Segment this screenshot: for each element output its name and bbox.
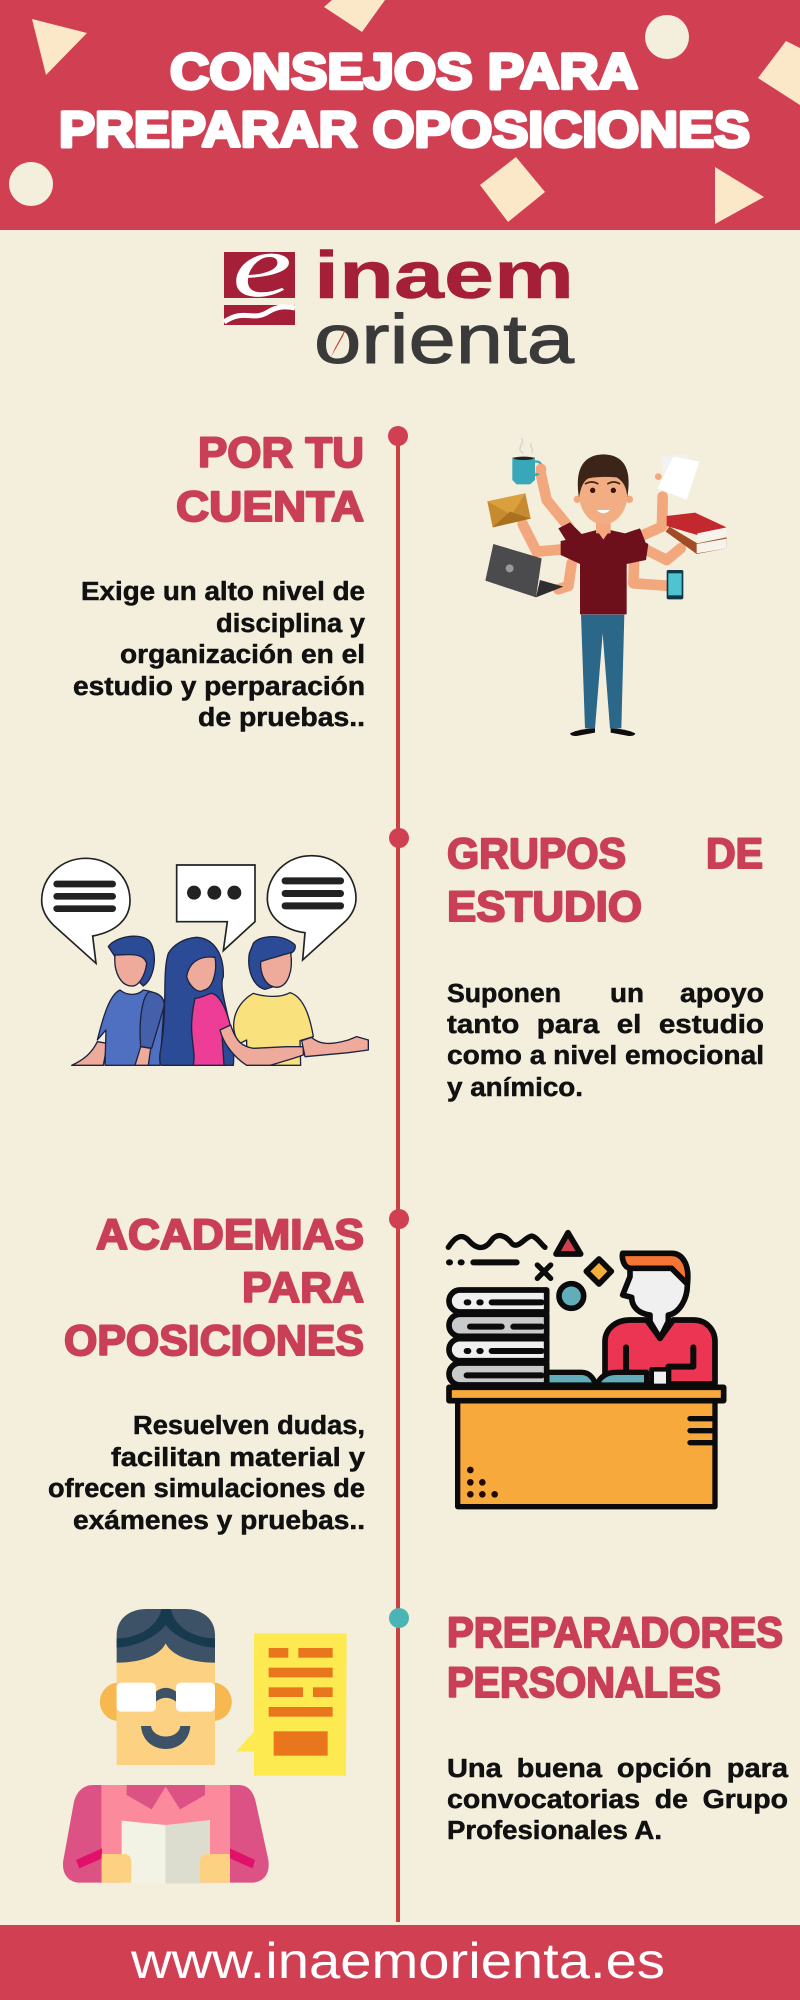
section 4 text bbox=[447, 1755, 789, 1845]
title: PREPARAR OPOSICIONES bbox=[59, 102, 750, 158]
section 1 text bbox=[73, 578, 366, 732]
section 1 text: estudio y perparación bbox=[73, 673, 365, 701]
section 3 heading: academias para oposiciones: OPOSICIONES bbox=[64, 1317, 364, 1365]
section 4 heading: preparadores personales: PERSONALES bbox=[447, 1659, 721, 1707]
title: CONSEJOS PARA bbox=[170, 44, 638, 100]
section 3 text bbox=[48, 1412, 366, 1535]
section 3 text: Resuelven dudas, bbox=[133, 1412, 365, 1440]
section 4 heading: preparadores personales: PREPARADORES bbox=[447, 1609, 783, 1657]
section 2 heading: grupos de estudio: GRUPOS bbox=[447, 830, 626, 878]
illustration: student at desk bbox=[448, 1233, 724, 1507]
section 2 heading: grupos de estudio: ESTUDIO bbox=[447, 883, 642, 931]
section 2 text: un bbox=[610, 980, 644, 1008]
three students bbox=[72, 936, 368, 1065]
illustration: man multitasking bbox=[485, 438, 727, 736]
section 1 text: organización en el bbox=[120, 641, 365, 669]
section 2 text: como a nivel emocional bbox=[447, 1042, 764, 1070]
speech bubble right bbox=[267, 856, 356, 960]
illustration: study group bbox=[42, 856, 368, 1065]
illustration: personal tutor bbox=[63, 1609, 347, 1883]
section 2 text: Suponen bbox=[447, 980, 561, 1008]
section 1 text: disciplina y bbox=[216, 610, 366, 638]
section 3 text: ofrecen simulaciones de bbox=[48, 1475, 365, 1503]
footer band bbox=[0, 1925, 800, 2000]
section 1 heading: por tu cuenta: CUENTA bbox=[176, 483, 364, 531]
section 1 text: de pruebas.. bbox=[198, 704, 365, 732]
section 2 text bbox=[447, 980, 764, 1102]
timeline bbox=[388, 426, 409, 1922]
section 1 heading: por tu cuenta bbox=[176, 429, 364, 531]
section 3 heading: academias para oposiciones: PARA bbox=[242, 1264, 364, 1312]
section 2 heading: grupos de estudio: DE bbox=[706, 830, 763, 878]
section 3 heading: academias para oposiciones: ACADEMIAS bbox=[96, 1211, 364, 1259]
section 4 text: Una buena opción para bbox=[447, 1755, 789, 1783]
section 4 text: convocatorias de Grupo bbox=[447, 1786, 788, 1814]
speech bubble middle bbox=[177, 865, 255, 951]
section 2 heading: grupos de estudio bbox=[447, 830, 763, 931]
logo: inaem orienta: e bbox=[232, 217, 292, 316]
logo: inaem orienta bbox=[224, 217, 574, 378]
section 1 heading: por tu cuenta: POR TU bbox=[198, 429, 364, 477]
title bbox=[59, 44, 750, 158]
logo: inaem orienta: orienta bbox=[314, 300, 574, 378]
section 2 text: tanto para el estudio bbox=[447, 1011, 764, 1039]
section 2 text: y anímico. bbox=[447, 1074, 583, 1102]
section 3 text: exámenes y pruebas.. bbox=[73, 1507, 365, 1535]
section 1 text: Exige un alto nivel de bbox=[81, 578, 365, 606]
section 4 text: Profesionales A. bbox=[447, 1817, 662, 1845]
logo: inaem orienta: inaem bbox=[314, 238, 574, 313]
footer url: www.inaemorienta.es bbox=[130, 1933, 665, 1989]
speech bubble left bbox=[42, 858, 130, 963]
section 4 heading: preparadores personales bbox=[447, 1609, 783, 1707]
section 2 text: apoyo bbox=[680, 980, 764, 1008]
section 3 heading: academias para oposiciones bbox=[64, 1211, 364, 1365]
section 3 text: facilitan material y bbox=[111, 1444, 366, 1472]
header banner bbox=[0, 0, 800, 230]
